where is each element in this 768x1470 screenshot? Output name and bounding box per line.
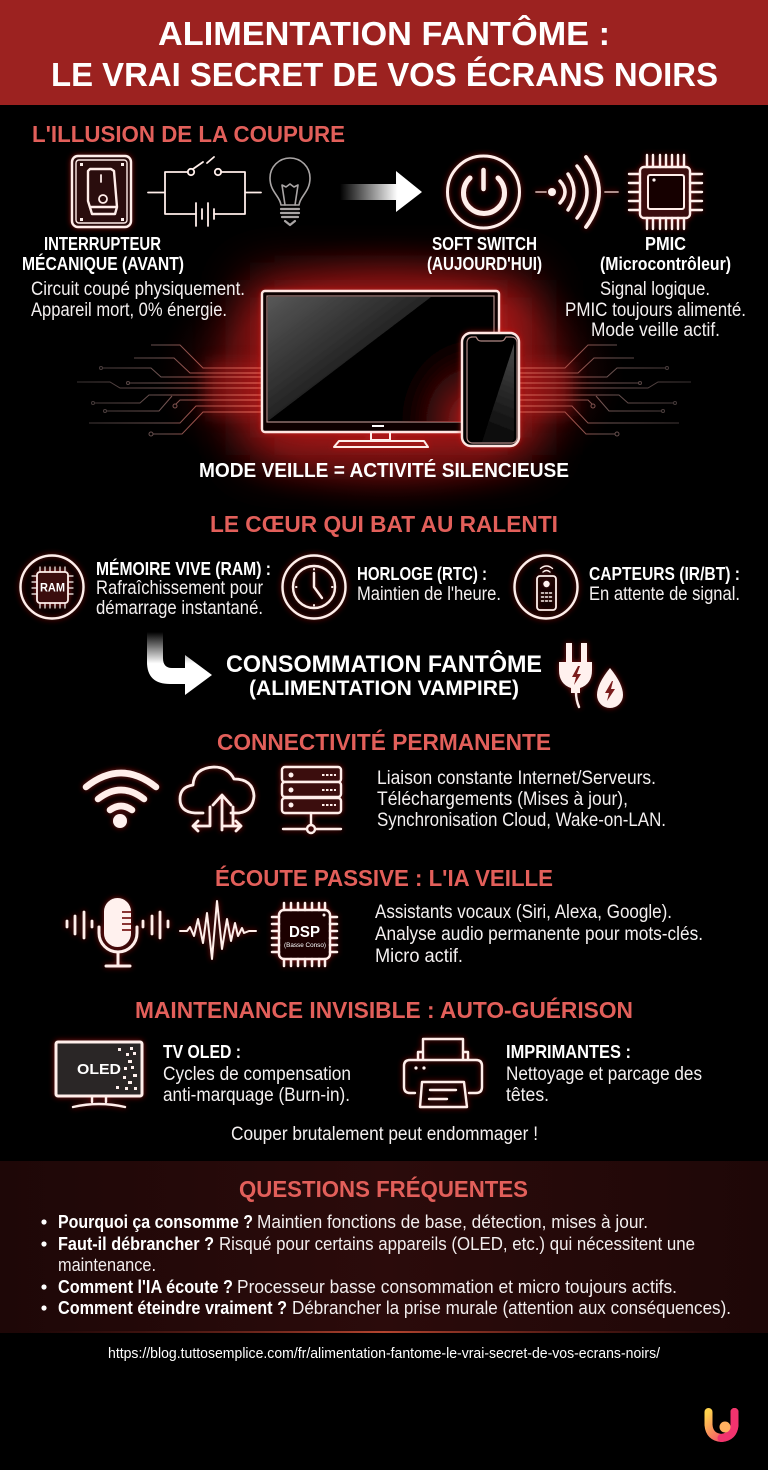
text: signal logique: Signal logique. bbox=[600, 279, 710, 300]
icon: PMIC chip bbox=[629, 155, 702, 229]
heading: le coeur: LE CŒUR QUI BAT AU RALENTI bbox=[210, 511, 558, 537]
icon: smartphone bbox=[462, 333, 519, 446]
text: assistants vocaux: Micro actif. bbox=[375, 946, 463, 967]
faq list: Maintien fonctions de base, détection, mises à jour. bbox=[257, 1211, 648, 1232]
icon: OLED TV: OLED bbox=[77, 1061, 121, 1078]
text: capteurs bbox=[589, 563, 740, 605]
text: mémoire vive: démarrage instantané. bbox=[96, 598, 263, 619]
icon: plug and drop bbox=[559, 643, 623, 708]
text: circuit coupé: Appareil mort, 0% énergie. bbox=[31, 300, 227, 321]
arrow: before to today bbox=[340, 171, 422, 212]
icon: remote control bbox=[514, 556, 578, 618]
text: mémoire vive: MÉMOIRE VIVE (RAM) : bbox=[96, 558, 271, 579]
text: circuit coupé bbox=[31, 279, 245, 321]
text: TV OLED: TV OLED : bbox=[163, 1041, 241, 1062]
faq list bbox=[41, 1211, 731, 1318]
icon: RAM bbox=[20, 556, 84, 618]
title bbox=[51, 14, 718, 93]
circuit traces left bbox=[77, 345, 262, 436]
text: liaison constante bbox=[377, 768, 666, 831]
logo bbox=[708, 1412, 734, 1438]
icon: power button bbox=[448, 156, 520, 228]
title: LE VRAI SECRET DE VOS ÉCRANS NOIRS bbox=[51, 56, 718, 93]
icon: circuit diagram bbox=[148, 157, 261, 226]
arrow: to phantom consumption bbox=[147, 632, 212, 695]
text: assistants vocaux bbox=[375, 902, 703, 967]
source url: https://blog.tuttosemplice.com/fr/alimentation-fantome-le-vrai-secret-de-vos-ecrans-noirs/ bbox=[108, 1346, 661, 1362]
circuit traces right bbox=[506, 345, 691, 436]
text: horloge: Maintien de l'heure. bbox=[357, 584, 501, 605]
text: signal logique: PMIC toujours alimenté. bbox=[565, 300, 746, 321]
faq list: Risqué pour certains appareils (OLED, etc.) qui nécessitent une bbox=[219, 1233, 695, 1254]
heading: connectivité: CONNECTIVITÉ PERMANENTE bbox=[217, 728, 551, 755]
icon: clock bbox=[282, 556, 346, 618]
faq list: Comment éteindre vraiment ? bbox=[58, 1297, 287, 1318]
label: soft switch: SOFT SWITCH bbox=[432, 233, 537, 254]
icon: server stack bbox=[282, 767, 341, 833]
label: interrupteur mécanique: MÉCANIQUE (AVANT) bbox=[22, 253, 184, 274]
panel: questions fréquentes bbox=[0, 1161, 768, 1333]
callout: consommation fantôme bbox=[226, 650, 542, 700]
caption: mode veille: MODE VEILLE = ACTIVITÉ SILENCIEUSE bbox=[199, 459, 569, 482]
text: assistants vocaux: Assistants vocaux (Siri, Alexa, Google). bbox=[375, 902, 672, 923]
title: ALIMENTATION FANTÔME : bbox=[158, 14, 610, 52]
icon: printer bbox=[404, 1039, 482, 1107]
icon: light bulb bbox=[270, 158, 310, 225]
text: liaison constante: Liaison constante Internet/Serveurs. bbox=[377, 768, 656, 789]
text: imprimantes bbox=[506, 1041, 702, 1106]
heading: maintenance invisible: MAINTENANCE INVISIBLE : AUTO-GUÉRISON bbox=[135, 996, 633, 1023]
red glow behind devices bbox=[155, 235, 625, 515]
text: capteurs: CAPTEURS (IR/BT) : bbox=[589, 563, 740, 584]
icon: cloud transfer bbox=[180, 767, 254, 831]
text: assistants vocaux: Analyse audio permanente pour mots-clés. bbox=[375, 924, 703, 945]
faq list: Processeur basse consommation et micro toujours actifs. bbox=[237, 1276, 677, 1297]
callout: consommation fantôme: CONSOMMATION FANTÔME bbox=[226, 650, 542, 678]
text: TV OLED bbox=[163, 1041, 351, 1106]
icon: DSP chip: DSP bbox=[289, 924, 320, 941]
faq list: maintenance. bbox=[58, 1254, 156, 1275]
text: TV OLED: anti-marquage (Burn-in). bbox=[163, 1085, 350, 1106]
text: imprimantes: têtes. bbox=[506, 1085, 549, 1106]
text: liaison constante: Synchronisation Cloud, Wake-on-LAN. bbox=[377, 810, 666, 831]
icon: OLED TV bbox=[56, 1042, 142, 1107]
icon: wifi bbox=[86, 773, 156, 828]
faq list: Pourquoi ça consomme ? bbox=[58, 1211, 253, 1232]
text: horloge bbox=[357, 563, 501, 605]
icon: microphone bbox=[67, 898, 168, 966]
heading: l'illusion de la coupure: L'ILLUSION DE LA COUPURE bbox=[32, 121, 345, 147]
callout: consommation fantôme: (ALIMENTATION VAMPIRE) bbox=[249, 677, 519, 700]
heading: écoute passive: ÉCOUTE PASSIVE : L'IA VEILLE bbox=[215, 864, 553, 891]
label: soft switch: (AUJOURD'HUI) bbox=[427, 253, 542, 274]
label: interrupteur mécanique bbox=[22, 233, 184, 274]
faq list: Comment l'IA écoute ? bbox=[58, 1276, 233, 1297]
label: PMIC: (Microcontrôleur) bbox=[600, 253, 731, 274]
text: TV OLED: Cycles de compensation bbox=[163, 1064, 351, 1085]
text: signal logique bbox=[565, 279, 746, 341]
text: imprimantes: Nettoyage et parcage des bbox=[506, 1064, 702, 1085]
text: liaison constante: Téléchargements (Mises à jour), bbox=[377, 789, 628, 810]
label: soft switch bbox=[427, 233, 542, 274]
warning note: Couper brutalement peut endommager ! bbox=[231, 1124, 538, 1145]
faq list: Débrancher la prise murale (attention aux conséquences). bbox=[292, 1297, 731, 1318]
icon: signal waves bbox=[536, 157, 618, 227]
label: interrupteur mécanique: INTERRUPTEUR bbox=[44, 233, 161, 254]
icon: mechanical switch bbox=[72, 156, 131, 227]
text: imprimantes: IMPRIMANTES : bbox=[506, 1041, 631, 1062]
text: mémoire vive bbox=[96, 558, 271, 619]
icon: RAM: RAM bbox=[40, 582, 65, 594]
text: mémoire vive: Rafraîchissement pour bbox=[96, 578, 264, 599]
text: horloge: HORLOGE (RTC) : bbox=[357, 563, 487, 584]
text: signal logique: Mode veille actif. bbox=[591, 320, 720, 341]
label: PMIC bbox=[600, 233, 731, 274]
text: capteurs: En attente de signal. bbox=[589, 584, 740, 605]
icon: television bbox=[258, 286, 503, 450]
heading: faq: QUESTIONS FRÉQUENTES bbox=[239, 1175, 528, 1202]
text: circuit coupé: Circuit coupé physiquement. bbox=[31, 279, 245, 300]
icon: sound wave bbox=[180, 901, 256, 959]
faq list: Faut-il débrancher ? bbox=[58, 1233, 214, 1254]
icon: DSP chip: (Basse Conso) bbox=[284, 942, 326, 949]
label: PMIC: PMIC bbox=[645, 233, 686, 254]
icon: DSP chip bbox=[272, 903, 337, 966]
header banner bbox=[0, 0, 768, 105]
